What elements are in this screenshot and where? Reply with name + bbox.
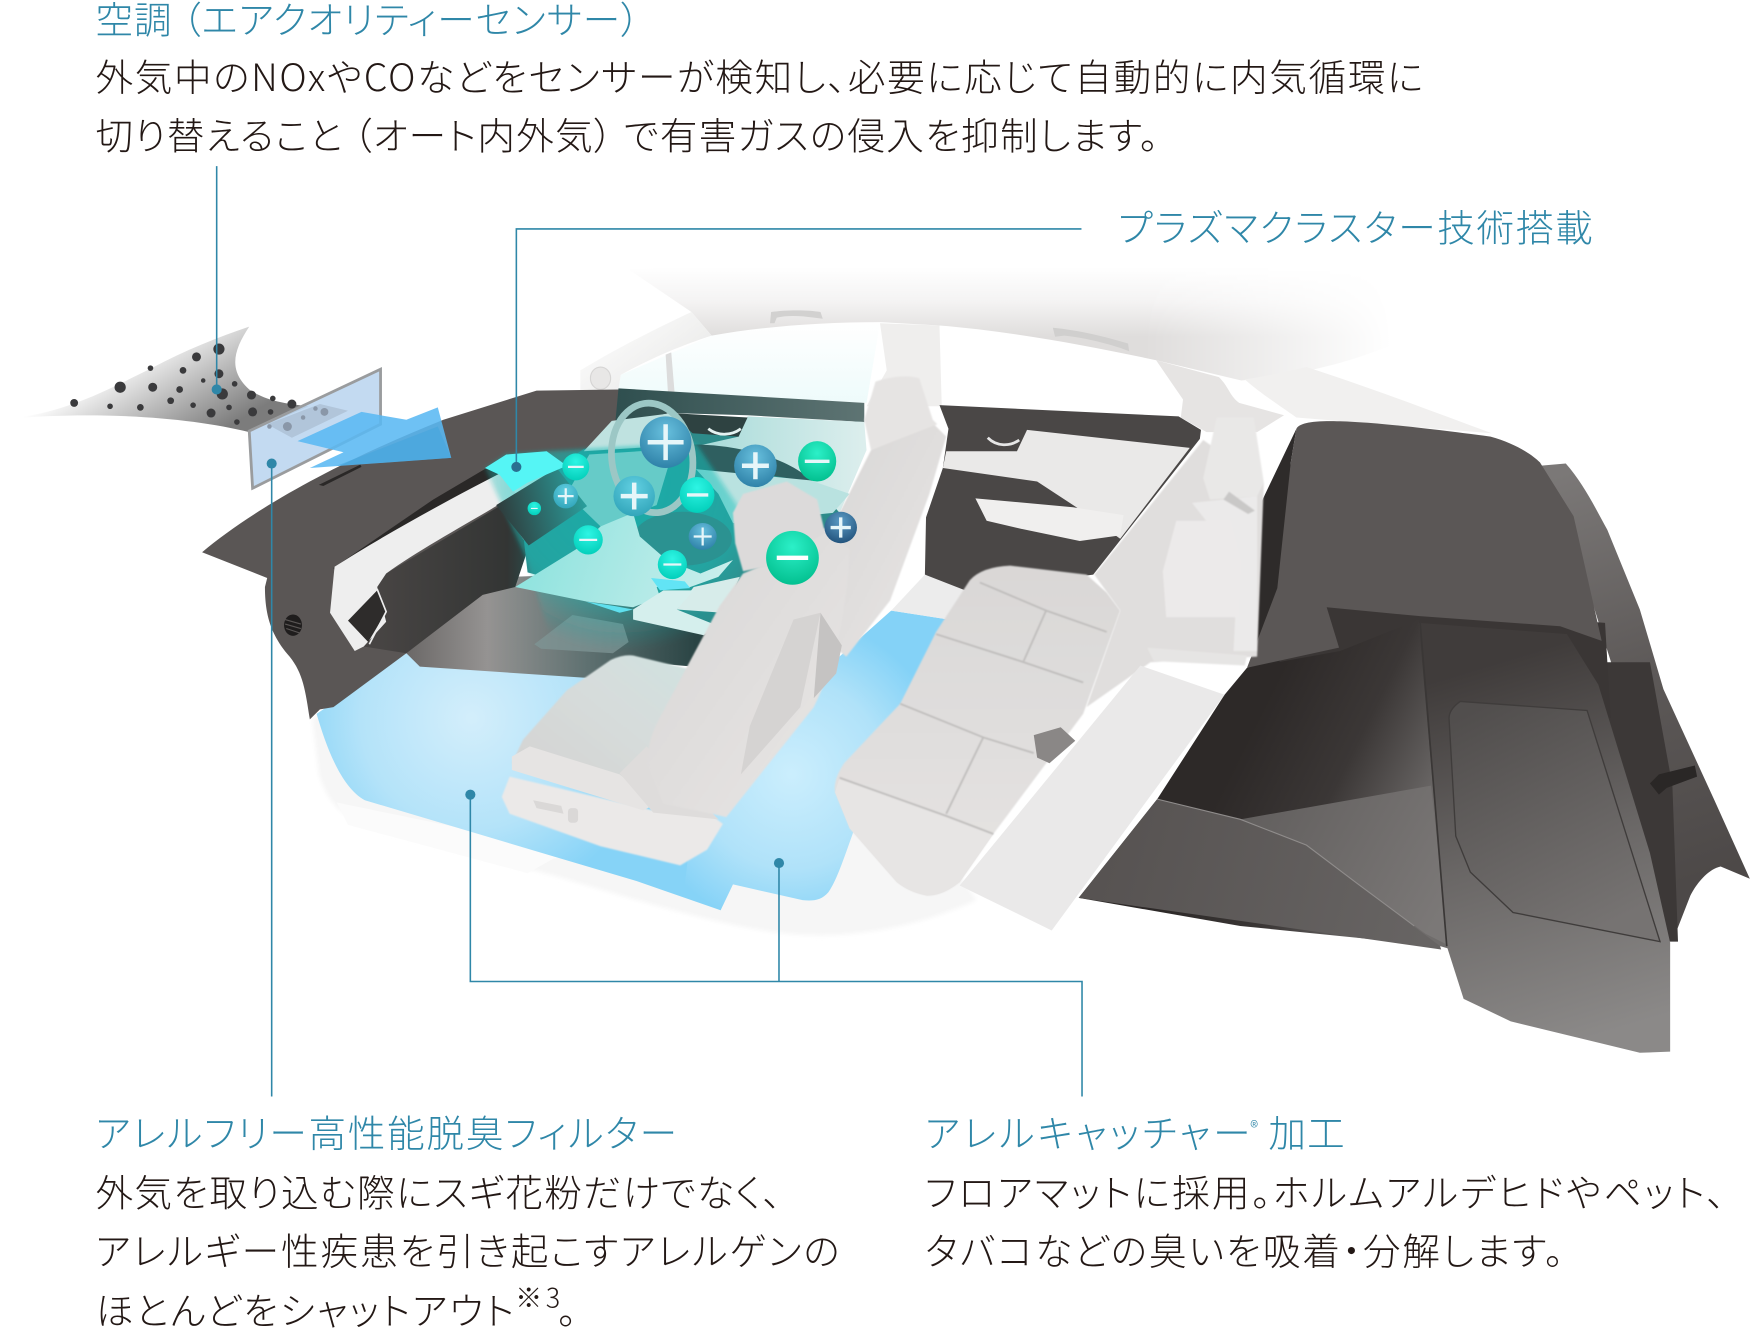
text: air quality sensor body: 切り替えること （オート内外気） で有害ガスの侵入を抑制します。 xyxy=(95,105,1158,160)
rear roof strip xyxy=(1245,367,1492,433)
text: filter heading: アレルフリー高性能脱臭フィルター xyxy=(95,1103,677,1158)
boot floor upper xyxy=(1079,620,1448,948)
dash slot xyxy=(319,465,361,486)
ions xyxy=(528,416,857,585)
text: allergen catcher body xyxy=(925,1163,1725,1276)
cushion xyxy=(512,655,707,810)
interior fill xyxy=(519,418,864,629)
cargo panel xyxy=(1419,623,1670,1053)
C pillar xyxy=(1156,360,1284,432)
lower footwell xyxy=(406,572,730,678)
leader lines and anchor dots xyxy=(212,166,1082,1097)
car roof and pillars xyxy=(580,291,1490,433)
A pillar xyxy=(580,312,712,393)
dashboard xyxy=(202,389,730,719)
bright vent wedge xyxy=(485,451,567,492)
leader: plasma cluster xyxy=(516,229,1081,467)
windows xyxy=(618,323,880,403)
blue airflow arrow xyxy=(297,407,451,468)
front seat xyxy=(502,481,850,865)
text: allergen catcher heading: アレルキャッチャー xyxy=(925,1103,1250,1158)
rear seat upright xyxy=(1087,418,1264,707)
text: allergen catcher heading: ® xyxy=(1250,1114,1258,1139)
icon: air vent xyxy=(348,589,386,644)
B pillar xyxy=(867,323,942,406)
white folded panel xyxy=(960,666,1225,930)
white trim xyxy=(330,474,516,651)
lower step xyxy=(1079,799,1441,950)
cabin base xyxy=(519,388,867,629)
far front seat xyxy=(825,376,946,657)
rear door xyxy=(891,405,1201,620)
centre dash panel xyxy=(364,506,529,653)
headrest xyxy=(733,481,825,571)
side trim xyxy=(1540,464,1750,942)
text: plasma cluster heading: プラズマクラスター技術搭載 xyxy=(1118,197,1593,252)
icon: speaker xyxy=(284,614,302,636)
base xyxy=(502,777,723,865)
grab handles xyxy=(770,310,823,323)
floor: blue mats and white sill xyxy=(312,611,977,935)
front door panel xyxy=(694,416,867,513)
text: allergen catcher body: フロアマットに採用。ホルムアルデヒドやペット、 xyxy=(925,1163,1725,1218)
text: allergen catcher heading: 加工 xyxy=(1268,1103,1345,1158)
rear seat xyxy=(835,566,1120,896)
leader: filter xyxy=(271,464,273,1097)
backing fill xyxy=(1246,600,1611,718)
seat back pocket xyxy=(741,613,821,774)
front door band xyxy=(615,388,864,424)
air filter plate xyxy=(249,369,381,488)
leader: floor mat xyxy=(470,795,1082,1097)
luggage mat xyxy=(1449,701,1660,942)
cabin: console and steering wheel xyxy=(485,398,740,635)
text: filter body: 外気を取り込む際にスギ花粉だけでなく、 xyxy=(95,1163,781,1218)
boot dark surfaces xyxy=(1079,421,1750,1053)
black strip behind seat xyxy=(1228,429,1296,701)
text: filter body: アレルギー性疾患を引き起こすアレルゲンの xyxy=(95,1221,840,1276)
teal plasma cluster glow xyxy=(485,443,752,673)
air stream with particles xyxy=(8,327,309,432)
backrest xyxy=(647,528,850,817)
leader: air quality sensor xyxy=(216,166,218,389)
text: air quality sensor body xyxy=(95,47,1423,160)
text: filter body: ※3 xyxy=(515,1277,560,1316)
seat back rear cover xyxy=(1247,421,1602,668)
text: filter body xyxy=(95,1163,840,1330)
upper dash xyxy=(202,389,629,719)
text: allergen catcher body: タバコなどの臭いを吸着・分解します。 xyxy=(925,1221,1564,1276)
text: air quality sensor body: 外気中のNOxやCOなどをセンサーが検知し、必要に応じて自動的に内気循環に xyxy=(95,47,1423,102)
